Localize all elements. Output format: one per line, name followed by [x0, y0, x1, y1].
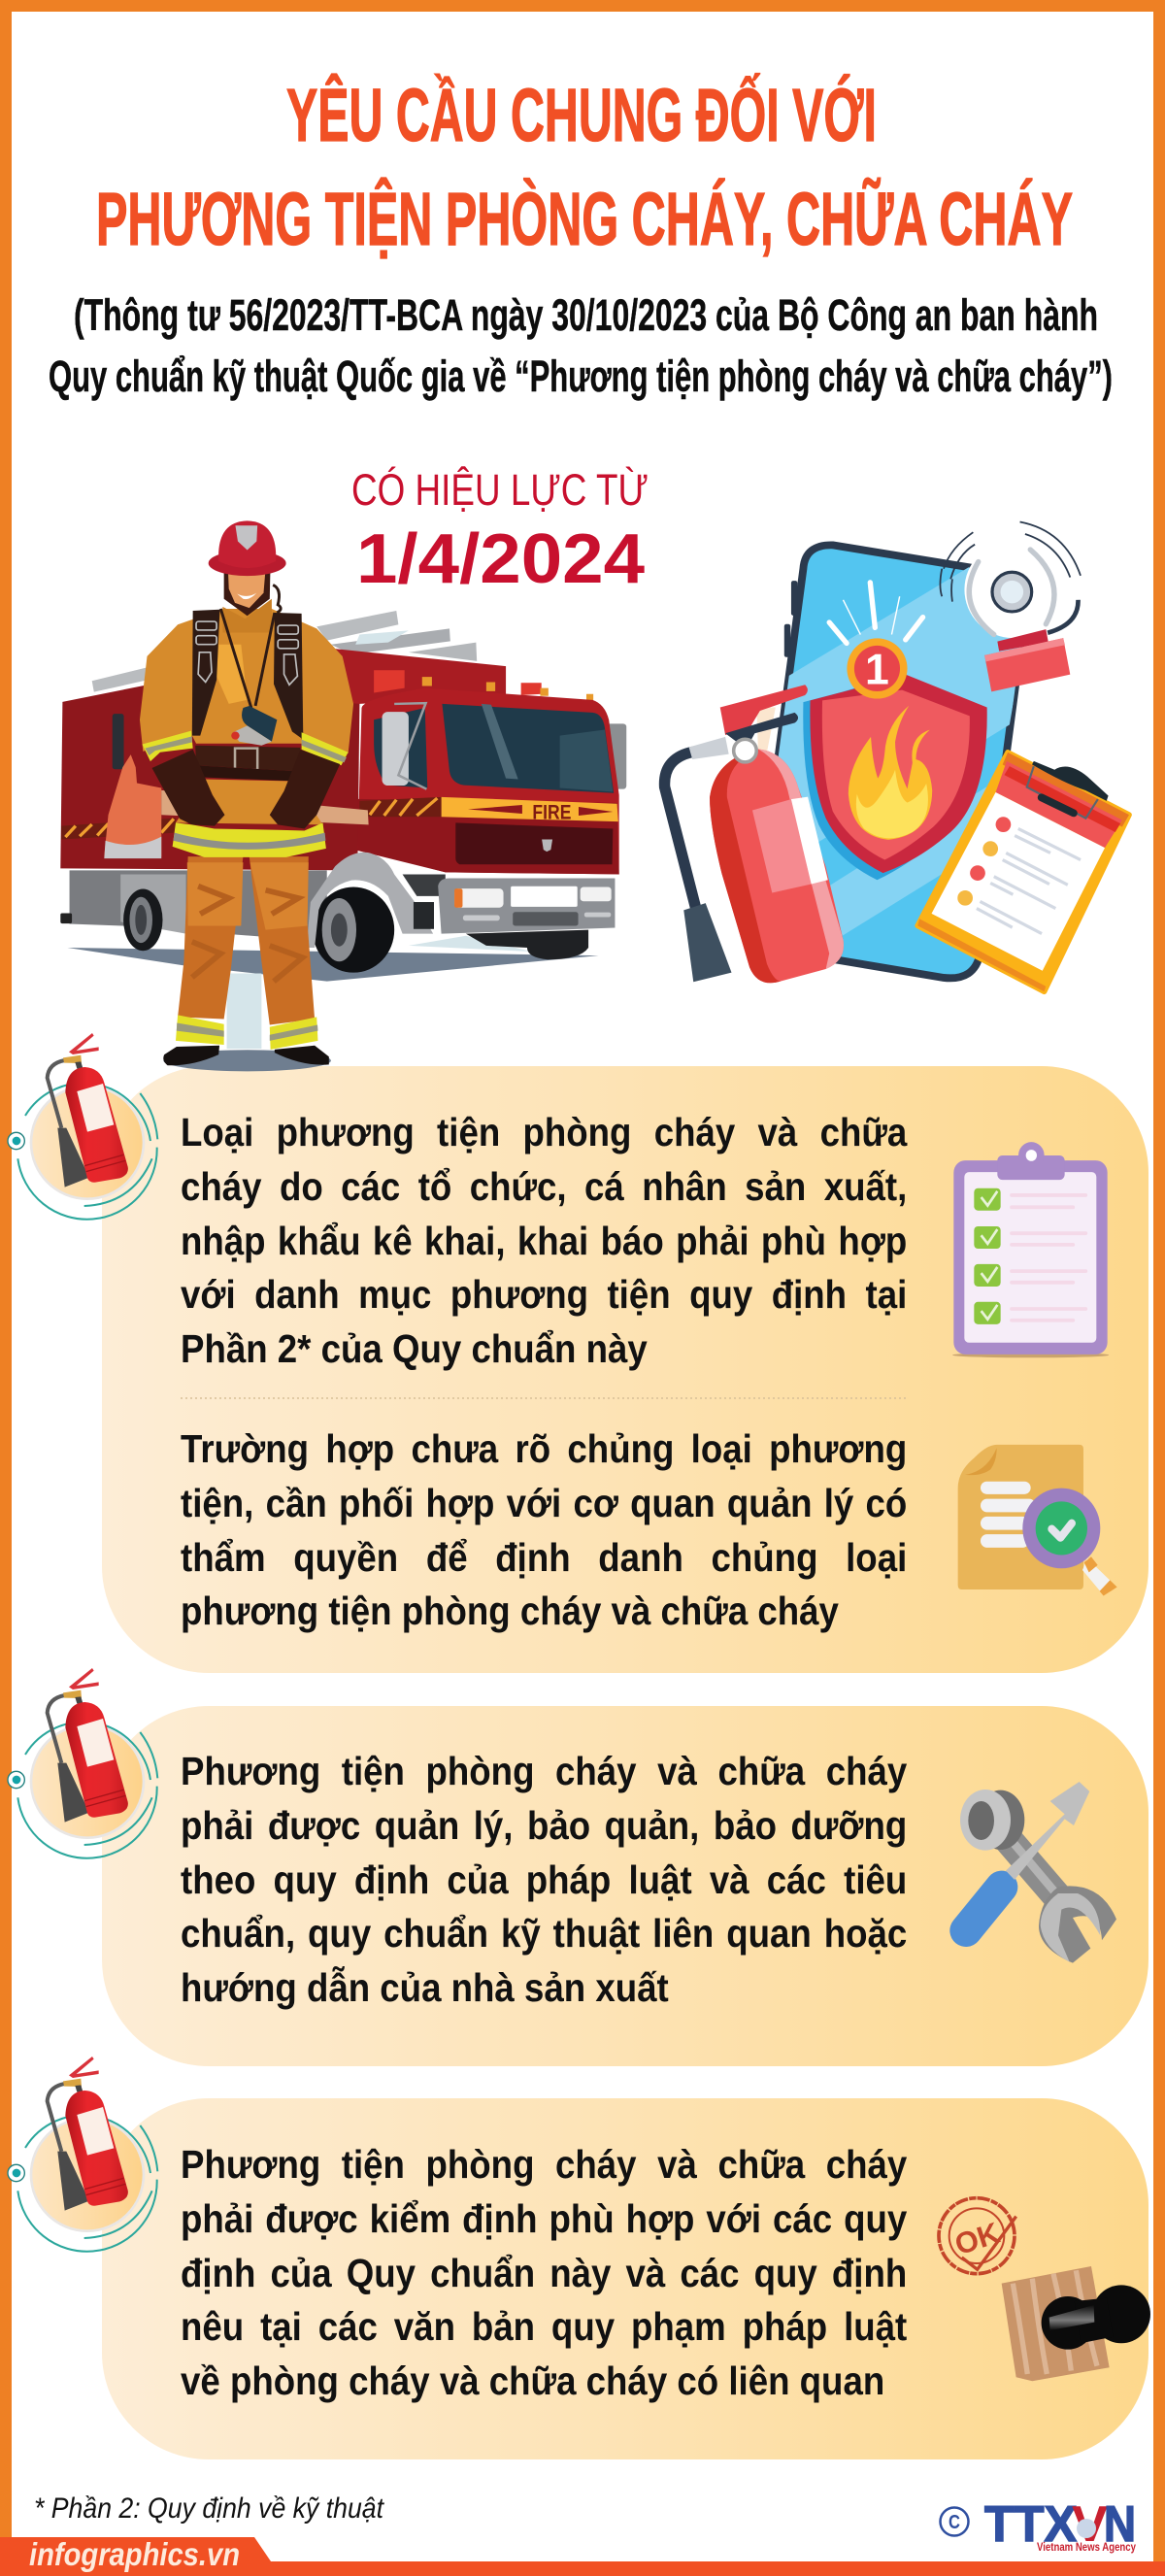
- logo: TTXVN: V: [1072, 2496, 1108, 2553]
- footnote: * Phần 2: Quy định về kỹ thuật: [34, 2492, 384, 2525]
- logo: TTXVN: N: [1104, 2496, 1136, 2553]
- icon: wrench and screwdriver: [960, 1782, 1116, 1963]
- icon: OK stamp: OK: [950, 2217, 1004, 2261]
- text block: requirement 3: định của Quy chuẩn này và các quy định: [181, 2251, 907, 2295]
- text block: requirement 1 paragraph 2: phương tiện phòng cháy và chữa cháy: [181, 1589, 839, 1633]
- text block: requirement 2: theo quy định của pháp luật và các tiêu: [181, 1857, 907, 1902]
- logo: TTXVN: [940, 2496, 1136, 2554]
- text block: requirement 3: nêu tại các văn bản quy phạm pháp luật: [181, 2304, 907, 2349]
- text block: requirement 1 paragraph 1: với danh mục phương tiện quy định tại: [181, 1272, 907, 1317]
- text block: requirement 1 paragraph 2: [181, 1426, 907, 1633]
- icon: extinguisher badge 1: [8, 1033, 157, 1220]
- icon: document with magnifier: [958, 1445, 1117, 1596]
- title: [96, 73, 1073, 261]
- text block: requirement 1 paragraph 1: Phần 2* của Quy chuẩn này: [181, 1326, 648, 1371]
- text block: requirement 1 paragraph 1: Loại phương tiện phòng cháy và chữa: [181, 1110, 907, 1154]
- panel: requirement 1: [102, 1066, 1148, 1673]
- effective date: CÓ HIỆU LỰC TỪ: [351, 465, 649, 515]
- illustration: firefighter: [104, 520, 369, 1071]
- effective date: 1/4/2024: [356, 520, 645, 598]
- text block: requirement 1 paragraph 1: nhập khẩu kê khai, khai báo phải phù hợp: [181, 1219, 907, 1263]
- icon: extinguisher badge 2: [8, 1668, 157, 1858]
- logo: TTXVN: TTX: [984, 2496, 1077, 2553]
- text block: requirement 2: Phương tiện phòng cháy và chữa cháy: [181, 1749, 907, 1793]
- illustration: fire truck: FIRE: [532, 800, 571, 823]
- text block: requirement 1 paragraph 2: thẩm quyền để định danh chủng loại: [181, 1535, 907, 1580]
- text block: requirement 3: phải được kiểm định phù hợp với các quy: [181, 2196, 907, 2241]
- text block: requirement 2: hướng dẫn của nhà sản xuất: [181, 1965, 669, 2010]
- panel: requirement 3: [102, 2098, 1148, 2459]
- icon: OK stamp: [939, 2198, 1150, 2381]
- text block: requirement 1 paragraph 1: [181, 1110, 907, 1371]
- text block: requirement 2: chuẩn, quy chuẩn kỹ thuật liên quan hoặc: [181, 1911, 907, 1956]
- effective date: [351, 465, 649, 598]
- text block: requirement 2: [181, 1749, 907, 2010]
- footer bar: infographics.vn: [29, 2536, 240, 2572]
- illustration: fire safety objects: 1: [865, 647, 889, 694]
- text block: requirement 1 paragraph 2: tiện, cần phối hợp với cơ quan quản lý có: [181, 1481, 907, 1525]
- text block: requirement 1 paragraph 1: cháy do các tổ chức, cá nhân sản xuất,: [181, 1164, 907, 1209]
- panel: requirement 2: [102, 1706, 1148, 2066]
- footer bar: [0, 2536, 1165, 2576]
- text block: requirement 3: về phòng cháy và chữa cháy có liên quan: [181, 2359, 884, 2403]
- icon: checklist clipboard: [952, 1142, 1109, 1357]
- illustration: fire truck: [60, 611, 626, 982]
- subtitle: [49, 290, 1113, 401]
- text block: requirement 3: Phương tiện phòng cháy và chữa cháy: [181, 2142, 907, 2187]
- text block: requirement 1 paragraph 2: Trường hợp chưa rõ chủng loại phương: [181, 1426, 907, 1471]
- icon: extinguisher badge 3: [8, 2057, 157, 2252]
- logo: TTXVN: C: [949, 2512, 960, 2533]
- illustration: fire safety objects: [665, 521, 1129, 991]
- logo: TTXVN: Vietnam News Agency: [1037, 2540, 1136, 2554]
- text block: requirement 2: phải được quản lý, bảo quản, bảo dưỡng: [181, 1803, 907, 1848]
- text block: requirement 3: [181, 2142, 907, 2403]
